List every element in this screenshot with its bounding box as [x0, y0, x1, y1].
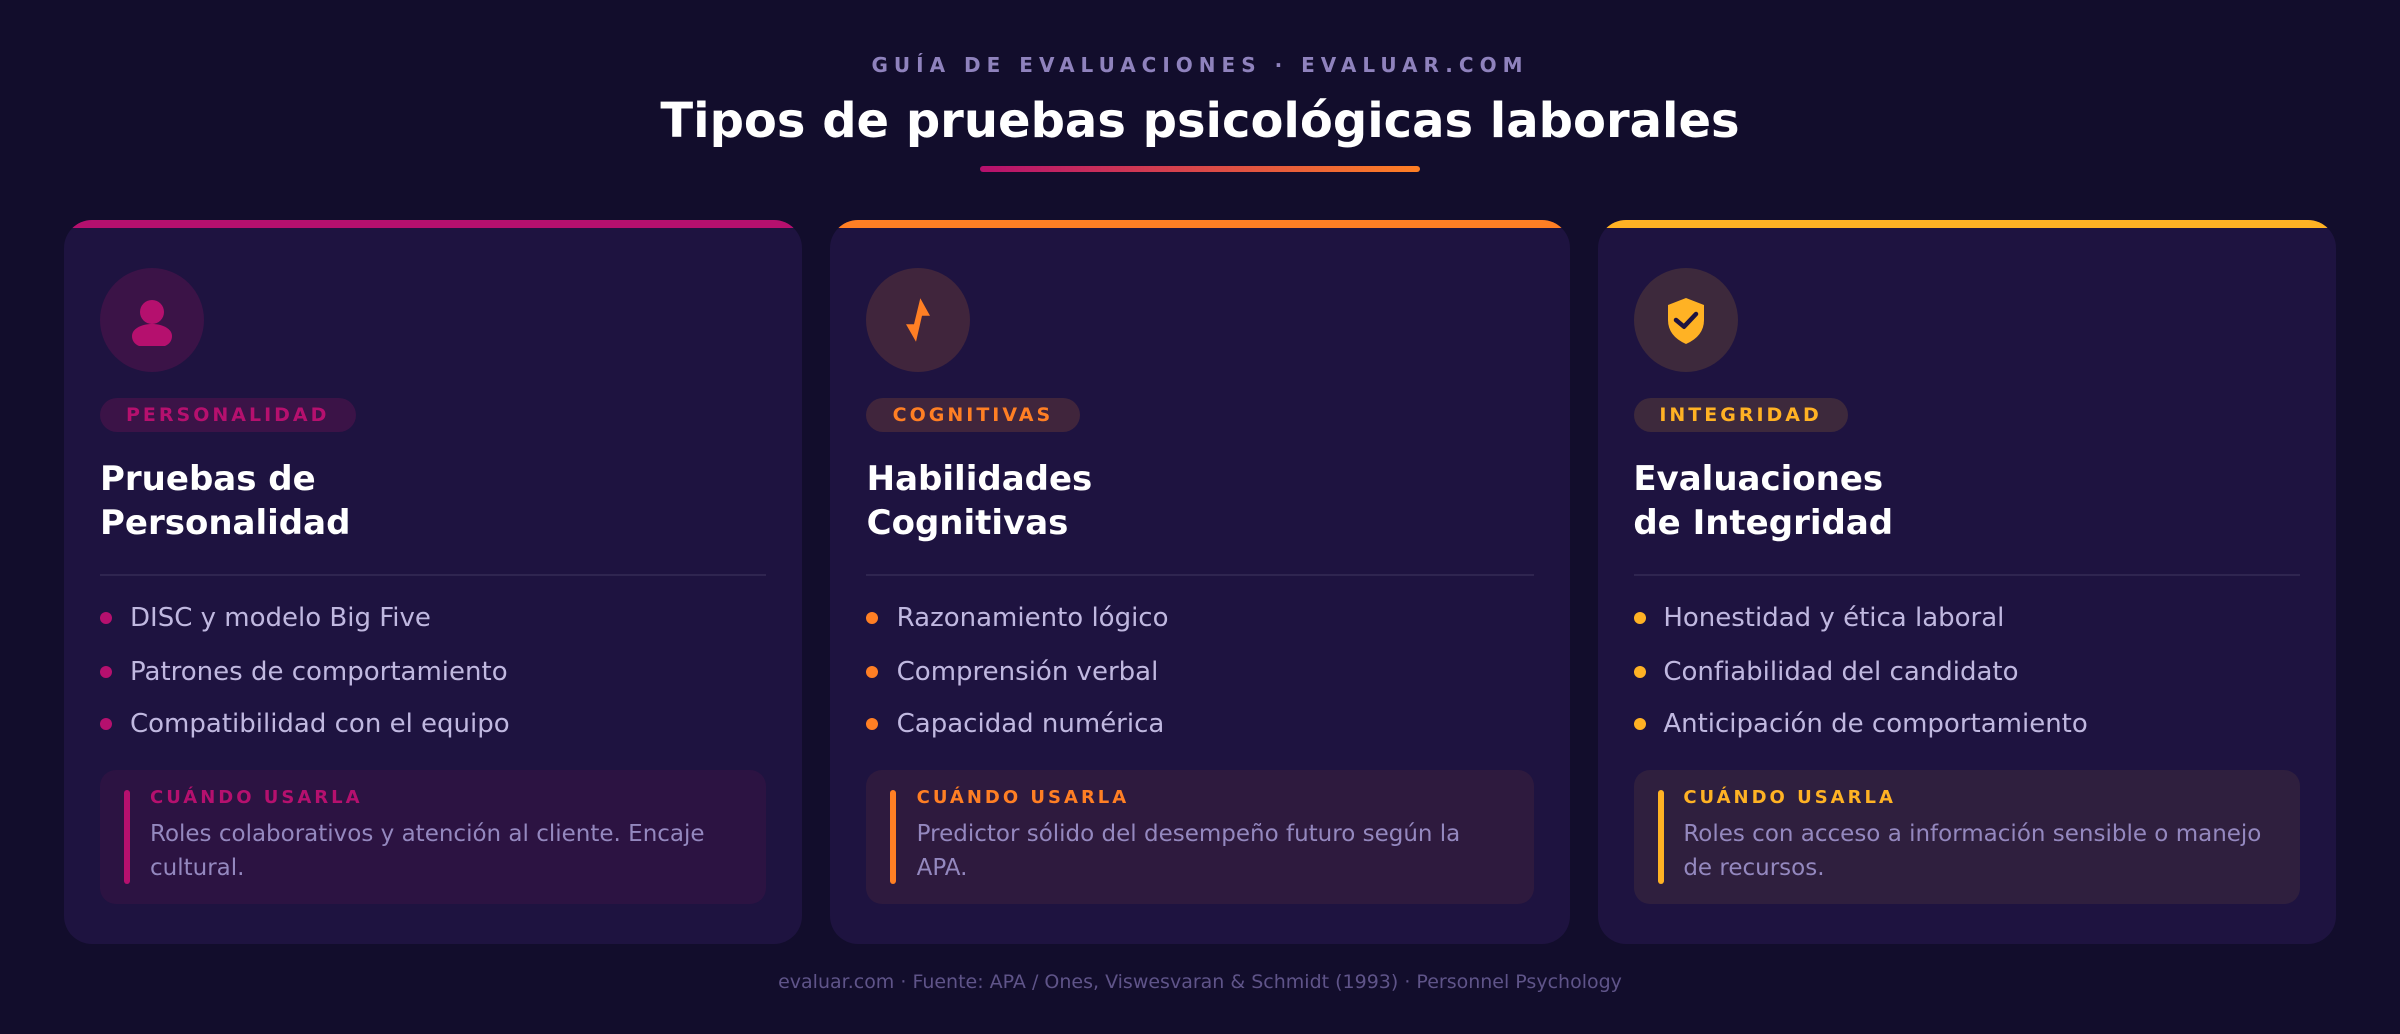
bullet list: [866, 603, 1169, 739]
eyebrow: GUÍA DE EVALUACIONES · EVALUAR.COM: [872, 53, 1528, 77]
bullet list: Patrones de comportamiento: [130, 657, 508, 687]
heading: de Integridad: [1633, 503, 1893, 543]
callout: Predictor sólido del desempeño futuro según la: [917, 821, 1460, 847]
title: Tipos de pruebas psicológicas laborales: [660, 93, 1740, 149]
icon: lightning bolt: [866, 268, 970, 372]
heading: Cognitivas: [867, 503, 1068, 543]
bullet list: [100, 603, 510, 739]
accent bar: [830, 220, 1570, 228]
callout: CUÁNDO USARLA: [1683, 787, 1896, 808]
heading: Pruebas de: [100, 459, 316, 499]
callout: de recursos.: [1683, 855, 1825, 881]
callout: APA.: [917, 855, 967, 881]
bullet list: Capacidad numérica: [897, 709, 1164, 739]
callout: Roles con acceso a información sensible o manejo: [1683, 821, 2261, 847]
bullet list: DISC y modelo Big Five: [130, 603, 431, 633]
heading: [867, 459, 1092, 543]
callout: Roles colaborativos y atención al cliente. Encaje: [150, 821, 705, 847]
title underline: [980, 166, 1420, 172]
heading: Evaluaciones: [1633, 459, 1883, 499]
bullet list: Anticipación de comportamiento: [1663, 709, 2088, 739]
heading: Habilidades: [867, 459, 1092, 499]
panel: personalidad: [64, 220, 802, 944]
panel: integridad: [1598, 220, 2336, 944]
callout: CUÁNDO USARLA: [917, 787, 1129, 808]
callout: cultural.: [150, 855, 244, 881]
tag: COGNITIVAS: [893, 404, 1053, 426]
heading: [100, 459, 350, 543]
bullet list: Honestidad y ética laboral: [1663, 603, 2004, 633]
callout: CUÁNDO USARLA: [150, 787, 363, 808]
bullet list: Razonamiento lógico: [897, 603, 1169, 633]
icon: person: [100, 268, 204, 372]
bullet list: Confiabilidad del candidato: [1663, 657, 2019, 687]
bullet list: Comprensión verbal: [897, 657, 1158, 687]
bullet list: [1634, 603, 2088, 739]
accent bar: [64, 220, 802, 228]
tag: INTEGRIDAD: [1659, 404, 1822, 426]
callout: [100, 770, 766, 904]
tag: [866, 398, 1080, 432]
panel: cognitivas: [830, 220, 1570, 944]
heading: Personalidad: [100, 503, 350, 543]
icon: shield: [1634, 268, 1738, 372]
tag: [1634, 398, 1848, 432]
tag: PERSONALIDAD: [126, 404, 329, 426]
tag: [100, 398, 356, 432]
callout: [1634, 770, 2300, 904]
footer: evaluar.com · Fuente: APA / Ones, Viswesvaran & Schmidt (1993) · Personnel Psychology: [778, 971, 1622, 993]
accent bar: [1598, 220, 2336, 228]
bullet list: Compatibilidad con el equipo: [130, 709, 510, 739]
callout: [866, 770, 1534, 904]
heading: [1633, 459, 1893, 543]
